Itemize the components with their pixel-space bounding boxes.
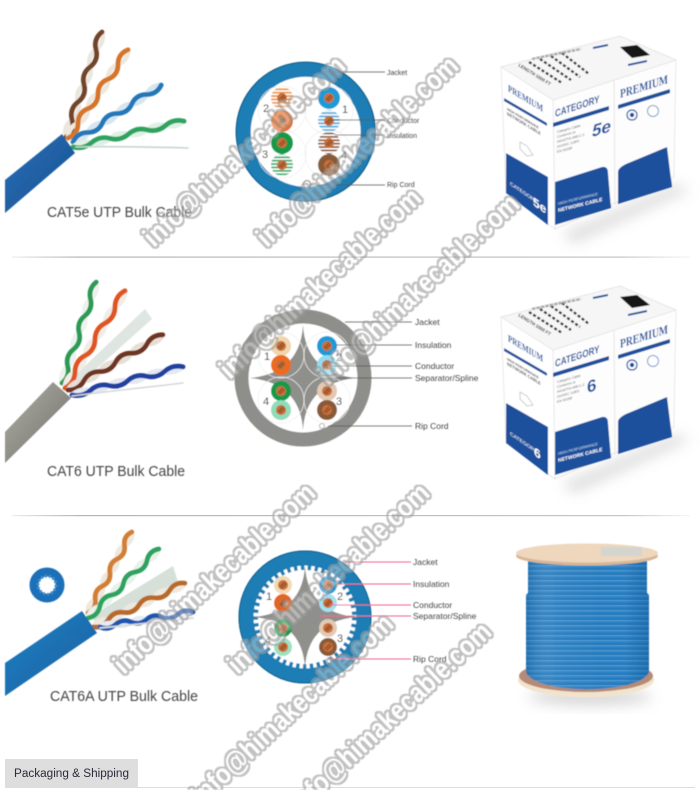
watermarks: repeated contact email: info@himakecable.com — [137, 50, 351, 252]
photo: bulk cable reel — [516, 544, 658, 705]
diagram: CAT5e cross section — [236, 62, 420, 201]
diagram: CAT6 cross section: Rip Cord — [415, 421, 449, 431]
photo: CAT6 retail box: 6 — [587, 374, 597, 397]
panel: CAT6A cable — [5, 532, 658, 705]
section dividers — [5, 256, 695, 788]
diagram: CAT6 cross section: 1 — [264, 351, 270, 363]
photo: CAT5e cable with twisted pairs — [5, 32, 188, 213]
diagram: CAT6 cross section — [242, 316, 479, 440]
photo: CAT6A cable with twisted pairs and spline — [5, 532, 193, 696]
diagram: CAT5e cross section: Jacket — [387, 70, 407, 77]
photo: CAT5e retail box — [501, 36, 690, 243]
diagram: CAT6 cross section: Separator/Spline — [415, 373, 479, 383]
diagram: CAT6 cross section: 4 — [263, 396, 269, 408]
diagram: CAT6 cross section: Insulation — [415, 340, 452, 350]
heading: CAT5e UTP Bulk Cable: CAT5e UTP Bulk Cable — [47, 205, 192, 221]
panel: CAT6 cable — [5, 282, 690, 493]
diagram: CAT6A cross section: 3 — [337, 633, 343, 645]
heading: CAT6A UTP Bulk Cable: CAT6A UTP Bulk Cable — [50, 689, 198, 705]
diagram: CAT6A cross section — [239, 551, 477, 683]
diagram: CAT5e cross section: 1 — [342, 104, 348, 116]
diagram: CAT6A cross section: Insulation — [413, 579, 450, 589]
photo: CAT6 retail box — [501, 286, 690, 493]
photo: CAT6 cable with twisted pairs and spline — [5, 282, 183, 463]
photo: CAT5e retail box: CATEGORY — [510, 181, 538, 206]
diagram: CAT5e cross section: Conductor — [387, 118, 420, 125]
diagram: CAT6 cross section: Conductor — [415, 361, 454, 371]
watermarks: repeated contact email: info@himakecable.com — [250, 50, 464, 252]
photo: CAT5e retail box: 5e — [533, 194, 546, 217]
diagram: CAT6A cross section: 1 — [266, 591, 272, 603]
watermarks: repeated contact email — [107, 50, 525, 790]
photo: CAT5e retail box: 5e — [592, 116, 611, 141]
heading: CAT6 UTP Bulk Cable: CAT6 UTP Bulk Cable — [47, 464, 185, 480]
photo: CAT6 retail box: 6 — [534, 444, 541, 462]
diagram: CAT6A cross section: 4 — [265, 635, 271, 647]
photo: CAT6 retail box: CATEGORY — [510, 431, 538, 456]
tab: Packaging & Shipping: Packaging & Shipping — [14, 768, 129, 780]
diagram: CAT5e cross section: Rip Cord — [387, 182, 415, 189]
diagram: CAT6A cross section: 2 — [337, 591, 343, 603]
tab: Packaging & Shipping — [5, 759, 138, 787]
diagram: CAT5e cross section: 4 — [341, 150, 347, 162]
icon: cable end ring — [34, 572, 60, 598]
watermarks: repeated contact email: info@himakecable.com — [107, 477, 321, 679]
diagram: CAT6A cross section: Separator/Spline — [413, 611, 477, 621]
diagram: CAT6A cross section: Conductor — [413, 600, 452, 610]
diagram: CAT6 cross section: 2 — [336, 352, 342, 364]
diagram: CAT6 cross section: 3 — [336, 396, 342, 408]
watermarks: repeated contact email: info@himakecable.com — [311, 188, 525, 390]
diagram: CAT5e cross section: 3 — [262, 149, 268, 161]
panel: CAT5e cable — [5, 32, 690, 243]
diagram: CAT5e cross section: 2 — [263, 103, 269, 115]
diagram: CAT6 cross section: Jacket — [415, 317, 440, 327]
diagram: CAT5e cross section: Insulation — [387, 133, 417, 140]
diagram: CAT6A cross section: Rip Cord — [413, 654, 447, 664]
watermarks: repeated contact email: info@himakecable.com — [213, 182, 427, 384]
diagram: CAT6A cross section: Jacket — [413, 557, 438, 567]
watermarks: repeated contact email: info@himakecable.com — [221, 477, 435, 679]
